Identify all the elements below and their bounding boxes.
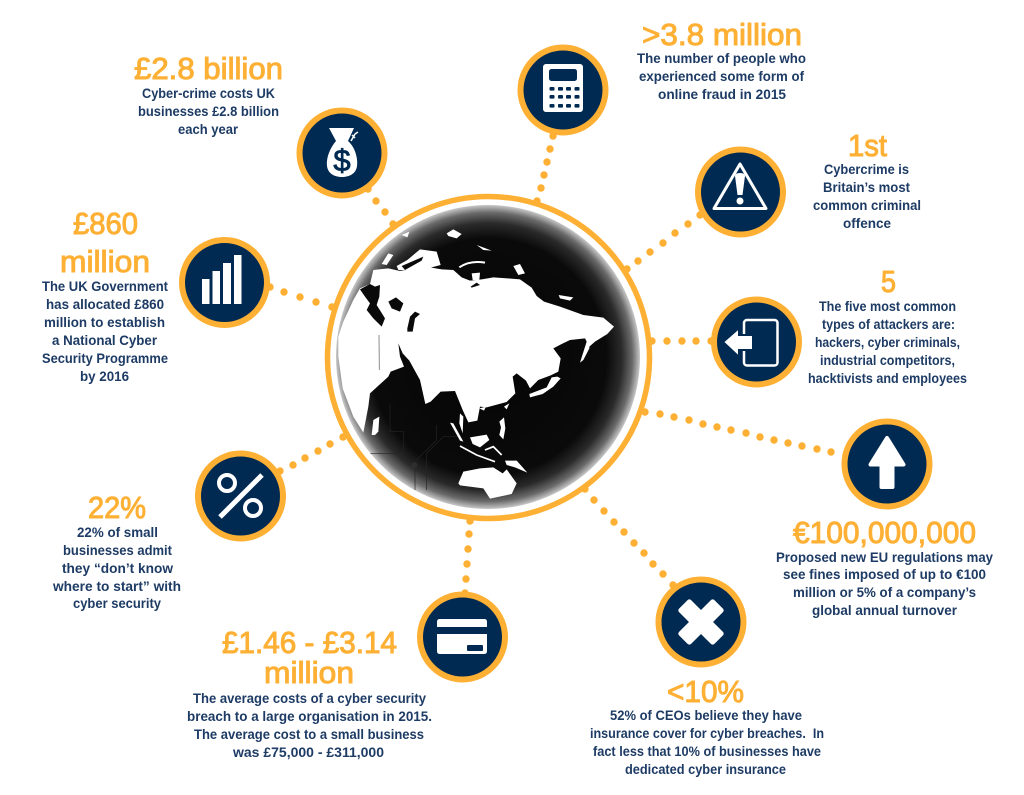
description: £860 million: a National Cyber [52, 332, 158, 348]
icon: calculator [520, 48, 606, 132]
stat: £2.8 billion [134, 51, 397, 228]
description: 5: The five most common [819, 298, 956, 314]
description: £860 million: by 2016 [80, 368, 129, 384]
icon: money bag: $ [333, 143, 351, 178]
description: €100,000,000: see fines imposed of up to €100 [783, 566, 986, 582]
description: >3.8 million: online fraud in 2015 [658, 86, 786, 102]
description: 22%: they “don’t know [62, 560, 173, 576]
description: 22%: businesses admit [63, 542, 172, 558]
connector dots: exit icon to globe [648, 337, 715, 345]
description: 22%: cyber security [73, 595, 161, 611]
icon: up arrow [844, 422, 930, 506]
globe orange ring [328, 196, 650, 518]
description: 5 [808, 298, 967, 386]
description: £860 million: million to establish [44, 314, 165, 330]
description: 5: hackers, cyber criminals, [815, 334, 960, 350]
description: £1.46 - £3.14 million: The average cost to a small business [194, 726, 424, 742]
description: 5: types of attackers are: [822, 316, 955, 332]
heading: <10%: <10% [667, 674, 744, 709]
description: 1st: Cybercrime is [824, 161, 909, 177]
stat: 1st [623, 128, 921, 273]
heading: €100,000,000: €100,000,000 [793, 515, 976, 550]
description: 22%: where to start” with [52, 578, 181, 594]
icon: cross [658, 580, 744, 664]
heading: 1st: 1st [848, 128, 887, 163]
globe [328, 196, 650, 518]
icon: percent [198, 454, 283, 538]
description: 5: industrial competitors, [820, 352, 955, 368]
heading: 22%: 22% [88, 490, 146, 525]
icon: money bag [300, 110, 384, 196]
description: €100,000,000: Proposed new EU regulations may [776, 549, 993, 565]
world map continents [338, 229, 614, 499]
description: £1.46 - £3.14 million [187, 690, 432, 760]
description: €100,000,000: million or 5% of a company’s [793, 584, 976, 600]
description: 1st: common criminal [813, 197, 921, 213]
description: £2.8 billion [138, 85, 279, 137]
description: 1st: Britain’s most [823, 179, 910, 195]
heading: £1.46 - £3.14 million [222, 625, 397, 690]
stat: €100,000,000 [641, 408, 993, 618]
description: £1.46 - £3.14 million: was £75,000 - £311,000 [232, 744, 384, 760]
connector dots: up arrow to globe [641, 408, 850, 459]
stat: 5 [648, 264, 967, 386]
description: €100,000,000: global annual turnover [812, 602, 958, 618]
heading: £1.46 - £3.14 million: million [264, 655, 354, 690]
icon: warning triangle [698, 150, 783, 234]
description: 1st: offence [843, 215, 891, 231]
stat: <10% [581, 485, 824, 777]
connector dots: card to globe [461, 517, 474, 597]
stat: >3.8 million [520, 17, 806, 205]
icon: exit door arrow [714, 300, 799, 384]
description: <10%: dedicated cyber insurance [625, 761, 786, 777]
description: <10%: fact less that 10% of businesses have [593, 743, 821, 759]
heading: £860 million: £860 [73, 206, 138, 241]
description: £860 million: has allocated £860 [46, 296, 164, 312]
description: 22% [52, 524, 181, 611]
connector dots: calculator to globe [533, 132, 557, 205]
description: £1.46 - £3.14 million: breach to a large organisation in 2015. [187, 708, 432, 724]
description: £2.8 billion: each year [178, 121, 239, 137]
heading: £860 million: million [60, 244, 150, 279]
description: £860 million: Security Programme [42, 350, 168, 366]
heading: >3.8 million: >3.8 million [642, 17, 802, 52]
description: 1st [813, 161, 921, 231]
connector dots: warning to globe [623, 211, 704, 273]
description: £860 million: The UK Government [42, 278, 168, 294]
connector dots: bars to globe [266, 283, 336, 311]
globe disc [336, 205, 640, 509]
stat: 22% [52, 433, 347, 611]
description: £860 million [42, 278, 168, 384]
stat: £1.46 - £3.14 million [187, 517, 505, 760]
description: £1.46 - £3.14 million: The average costs of a cyber security [193, 690, 426, 706]
description: <10%: insurance cover for cyber breaches. In [590, 725, 824, 741]
heading: 5: 5 [881, 264, 896, 299]
connector dots: percent to globe [276, 433, 347, 475]
heading: £1.46 - £3.14 million: £1.46 - £3.14 [222, 625, 397, 660]
icon: bar chart [182, 240, 267, 325]
description: <10% [590, 707, 824, 777]
stat: £860 million [42, 206, 336, 384]
connector dots: cross to globe [581, 485, 677, 589]
heading: £2.8 billion: £2.8 billion [134, 51, 283, 86]
description: 22%: 22% of small [77, 524, 158, 540]
description: £2.8 billion: businesses £2.8 billion [138, 103, 279, 119]
description: €100,000,000 [776, 549, 993, 618]
description: >3.8 million: experienced some form of [639, 68, 804, 84]
description: >3.8 million [637, 50, 806, 102]
description: 5: hacktivists and employees [808, 370, 967, 386]
heading: £860 million [60, 206, 150, 279]
description: >3.8 million: The number of people who [637, 50, 806, 66]
description: <10%: 52% of CEOs believe they have [610, 707, 802, 723]
description: £2.8 billion: Cyber-crime costs UK [142, 85, 275, 101]
icon: credit card [420, 594, 505, 680]
connector dots: money bag to globe [364, 185, 397, 228]
